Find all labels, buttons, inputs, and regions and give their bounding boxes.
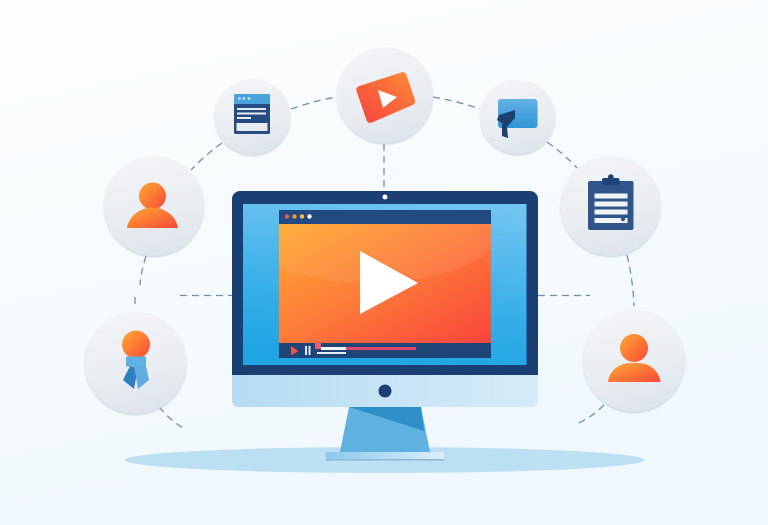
circle: award icon — [84, 312, 186, 414]
video area — [279, 224, 491, 343]
monitor base — [326, 452, 444, 460]
monitor screen — [243, 204, 526, 365]
floor shadow ellipse — [124, 447, 644, 473]
play triangle — [360, 251, 418, 314]
monitor stand — [340, 407, 430, 452]
icon: ribbon torch — [122, 330, 150, 389]
player controls — [279, 342, 491, 358]
video player window — [279, 210, 491, 358]
icon: clipboard — [588, 174, 634, 230]
circle: chat icon — [480, 80, 555, 154]
circle: person icon right — [583, 310, 685, 412]
monitor — [232, 191, 538, 460]
icon: person — [608, 334, 660, 382]
camera dot — [382, 194, 388, 200]
circle: video icon — [337, 48, 433, 144]
circle: person icon left — [104, 156, 204, 256]
player title bar — [279, 210, 491, 224]
monitor chin — [232, 370, 538, 407]
home button — [378, 384, 392, 398]
icon: tilted play button — [356, 72, 415, 123]
circle: document icon — [214, 79, 290, 155]
icon: blue panel with pointer — [497, 99, 538, 138]
circle: clipboard icon — [560, 156, 660, 256]
icon: person — [127, 182, 178, 228]
monitor frame — [232, 191, 538, 375]
dashed connectors — [135, 97, 634, 428]
icon: web form — [234, 94, 270, 134]
